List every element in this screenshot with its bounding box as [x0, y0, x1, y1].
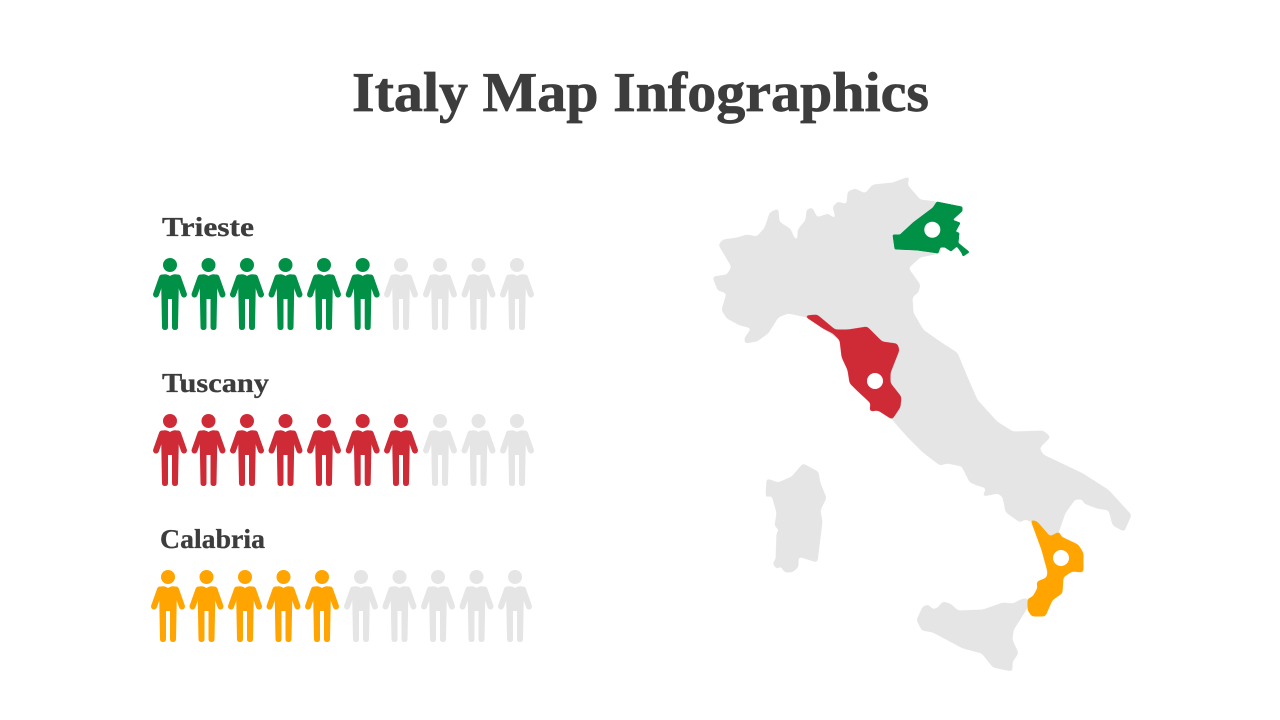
region: Sardinia	[766, 464, 826, 572]
panel: Tuscany	[156, 368, 531, 486]
pictogram: Calabria 5 of 10	[154, 570, 529, 642]
heading: Trieste: Trieste	[162, 212, 254, 242]
region: Sicily	[917, 599, 1028, 671]
region: mainland	[713, 177, 1131, 537]
pictogram: Trieste 6 of 10	[156, 258, 531, 330]
pictogram: Tuscany 7 of 10	[156, 414, 531, 486]
heading: Calabria: Calabria	[160, 524, 266, 554]
marker: Calabria	[1053, 550, 1069, 566]
region: Tuscany (red)	[805, 315, 901, 419]
marker: Tuscany	[867, 373, 883, 389]
map of Italy	[713, 177, 1131, 671]
panel: Trieste	[156, 212, 531, 330]
marker: Trieste	[924, 222, 940, 238]
panel: Calabria	[154, 524, 529, 642]
region: Calabria (orange)	[1028, 520, 1083, 616]
title: Italy Map Infographics	[352, 62, 929, 124]
region: Trieste (green)	[893, 202, 969, 256]
heading: Tuscany: Tuscany	[162, 368, 270, 398]
